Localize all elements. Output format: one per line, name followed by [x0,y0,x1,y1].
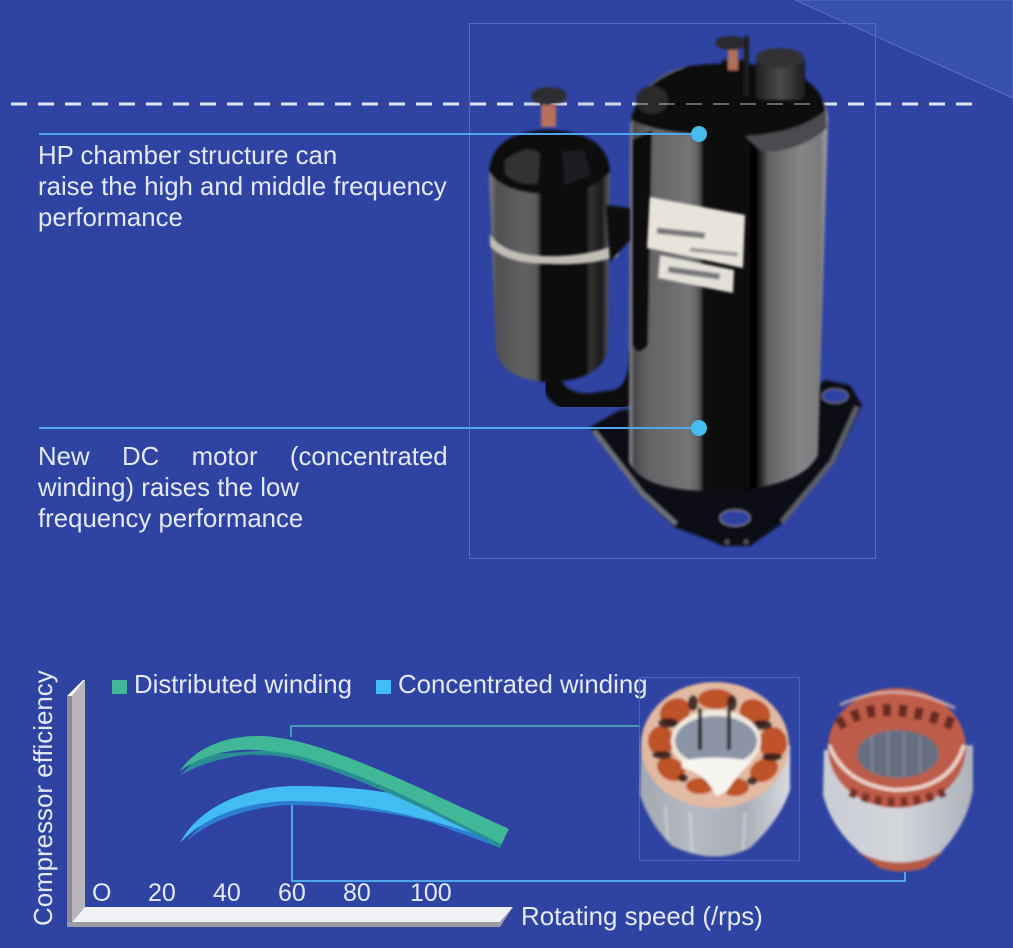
label sticker [647,197,745,293]
callout text: frequency performance [38,505,303,533]
x axis ticks: 40 [213,879,241,907]
image frame: compressor [470,24,876,558]
callout text: HP chamber structure can [38,142,337,170]
connector to concentrated stator [292,802,905,881]
stator: distributed winding [640,682,790,857]
legend [112,671,648,699]
chart: compressor efficiency vs rotating speed [30,670,905,931]
accumulator fitting [531,87,567,127]
x axis floor [67,907,513,927]
legend label: distributed: Distributed winding [134,671,352,699]
callout: HP chamber [38,126,707,232]
corner accent triangle [795,0,1013,98]
x axis label: Rotating speed (/rps) [521,903,763,931]
x axis ticks: O [92,879,111,907]
x axis ticks: 100 [410,879,452,907]
callout text: performance [38,204,183,232]
callout: DC motor [37,420,707,533]
mounting base plate [590,380,862,546]
top cap [756,48,805,100]
dash overlay on compressor [524,103,815,105]
bracket [606,205,630,262]
legend swatch: distributed [112,680,127,694]
connector to distributed stator [291,726,640,737]
x axis ticks [92,879,452,907]
callout text: winding) raises the low [37,474,299,502]
callout dot [691,420,707,436]
main cylinder [629,64,828,491]
leader line [39,133,699,135]
x axis ticks: 60 [278,879,306,907]
y axis label: Compressor efficiency [30,670,58,926]
x axis ticks: 20 [148,879,176,907]
stator: concentrated winding [823,688,973,872]
y axis wall [67,680,85,927]
accumulator tank [489,130,610,382]
x axis ticks: 80 [343,879,371,907]
connecting tube [550,350,640,404]
compressor illustration [489,36,862,546]
terminal pipe [715,36,749,118]
leader line [39,427,699,429]
image frame: distributed stator [640,678,800,860]
accumulator strap [490,234,618,264]
callout dot [691,126,707,142]
callout text: raise the high and middle frequency [38,173,447,201]
curve: concentrated winding [180,786,498,848]
curve: distributed winding [180,736,509,848]
legend label: concentrated: Concentrated winding [398,671,648,699]
dashed divider [11,102,975,106]
legend swatch: concentrated [376,680,391,694]
callout text: New DC motor (concentrated [38,443,448,471]
